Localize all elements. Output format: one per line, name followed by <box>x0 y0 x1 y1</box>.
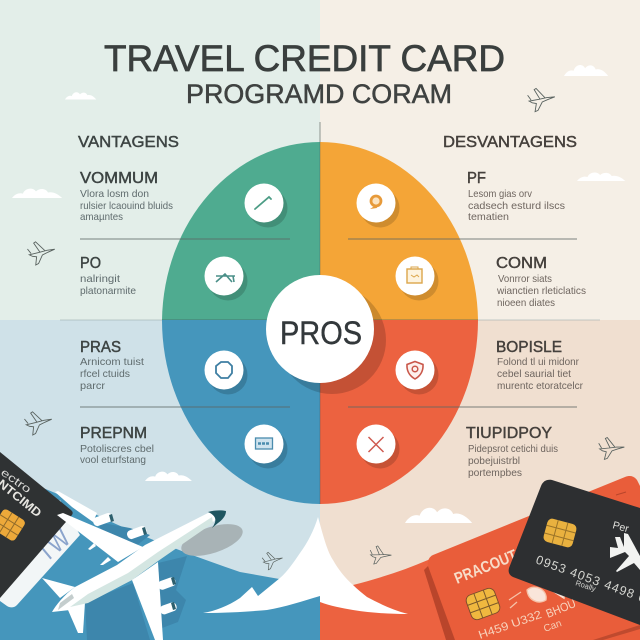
plane shadow <box>178 518 246 562</box>
lower engines <box>157 576 178 615</box>
far wing <box>55 491 97 522</box>
lower left blue ground <box>0 470 320 640</box>
text block: bopisle: BOPISLE <box>496 339 562 356</box>
cockpit <box>208 510 226 528</box>
text block: pras <box>80 339 144 392</box>
text block: conm: nioeen diates <box>497 297 555 309</box>
text block: conm: CONM <box>496 255 547 272</box>
chip <box>0 508 26 542</box>
icon: plane sketch <box>204 256 248 300</box>
text block: pf <box>467 170 565 223</box>
text block: po: PO <box>80 255 101 272</box>
upper engines <box>88 512 148 565</box>
text block: vommum: amaµntes <box>80 211 123 223</box>
text block: pras: PRAS <box>80 339 121 356</box>
text block: tiupidpoy: TIUPIDPOY <box>466 425 552 442</box>
fuselage <box>52 511 226 612</box>
text block: pras: Arnicom tuist <box>80 356 144 368</box>
right column heading: DESVANTAGENS <box>443 134 577 151</box>
black card: Roally <box>574 578 597 593</box>
tail fins <box>42 578 75 598</box>
text block: po <box>80 255 136 297</box>
text block: conm <box>496 255 586 309</box>
text block: bopisle <box>496 339 583 392</box>
black card chip <box>542 518 578 548</box>
text block: bopisle: Folond tl ui midonr <box>497 356 579 368</box>
text block: bopisle: cebel saurial tiet <box>497 368 571 380</box>
red card: PRACOUT <box>452 547 520 588</box>
red card plane sketch <box>509 587 564 608</box>
text block: tiupidpoy <box>466 425 558 479</box>
icon: shield <box>396 350 438 394</box>
small plane icons <box>24 87 624 570</box>
near wing <box>57 513 143 562</box>
lower wing <box>132 562 163 640</box>
text block: pras: parcr <box>80 380 106 392</box>
text block: prepnm: PREPNM <box>80 425 147 442</box>
text block: bopisle: murentc etoratcelcr <box>497 380 583 392</box>
centre label: PROS <box>280 315 362 351</box>
title: TRAVEL CREDIT CARD <box>104 37 505 79</box>
text block: vommum <box>80 170 173 223</box>
white swoosh <box>203 517 408 614</box>
left credit cards <box>0 452 80 607</box>
text block: prepnm <box>80 425 154 466</box>
red card <box>424 476 640 640</box>
left credit cards: TW <box>31 523 76 568</box>
icon: speech bubble <box>356 184 400 228</box>
title <box>104 37 505 109</box>
text block: pf: tematien <box>468 211 509 223</box>
subtitle: PROGRAMD CORAM <box>186 79 452 109</box>
text block: conm: wianctien rleticlatics <box>496 285 586 297</box>
airplane <box>42 491 246 640</box>
icon: line <box>244 184 288 228</box>
text block: prepnm: Potoliscres cbel <box>80 443 154 455</box>
text block: vommum: rulsier lcaouind bluids <box>80 200 173 212</box>
text block: prepnm: vool eturfstang <box>80 454 146 466</box>
text block: pf: PF <box>467 170 486 187</box>
text block: po: platonarmite <box>80 285 136 297</box>
black card plane <box>610 533 640 572</box>
text block: conm: Vonrror siats <box>498 273 552 285</box>
text block: pf: cadsech esturd ilscs <box>468 200 565 212</box>
black card <box>509 480 640 625</box>
right credit cards <box>424 476 640 640</box>
text block: vommum: VOMMUM <box>80 170 158 187</box>
left column heading: VANTAGENS <box>78 134 179 151</box>
decorative clouds <box>12 65 625 523</box>
text block: po: nalringit <box>80 273 120 285</box>
text block: vommum: Vlora losm don <box>80 188 149 200</box>
black card: Per <box>611 519 631 535</box>
text block: tiupidpoy: pobejuistrbl <box>468 455 520 467</box>
red card: BHOU <box>544 596 578 621</box>
red card: Can <box>542 618 563 635</box>
text block: tiupidpoy: Pidepsrot cetichi duis <box>468 443 558 455</box>
icon: briefcase <box>396 256 438 300</box>
text block: pf: Lesom gias orv <box>468 188 533 200</box>
icon: cross <box>356 424 400 468</box>
lower right red ground <box>320 545 480 640</box>
icon: banknote <box>244 424 288 468</box>
black card <box>0 452 73 598</box>
centre circle <box>266 275 386 394</box>
text block: pras: rfcel ctuids <box>80 368 130 380</box>
red card chip <box>464 587 502 621</box>
divider lines <box>80 239 577 407</box>
white card behind <box>0 500 80 607</box>
icon: hexagon <box>204 350 248 394</box>
central four-colour oval <box>162 142 478 504</box>
text block: tiupidpoy: portempbes <box>468 467 522 479</box>
